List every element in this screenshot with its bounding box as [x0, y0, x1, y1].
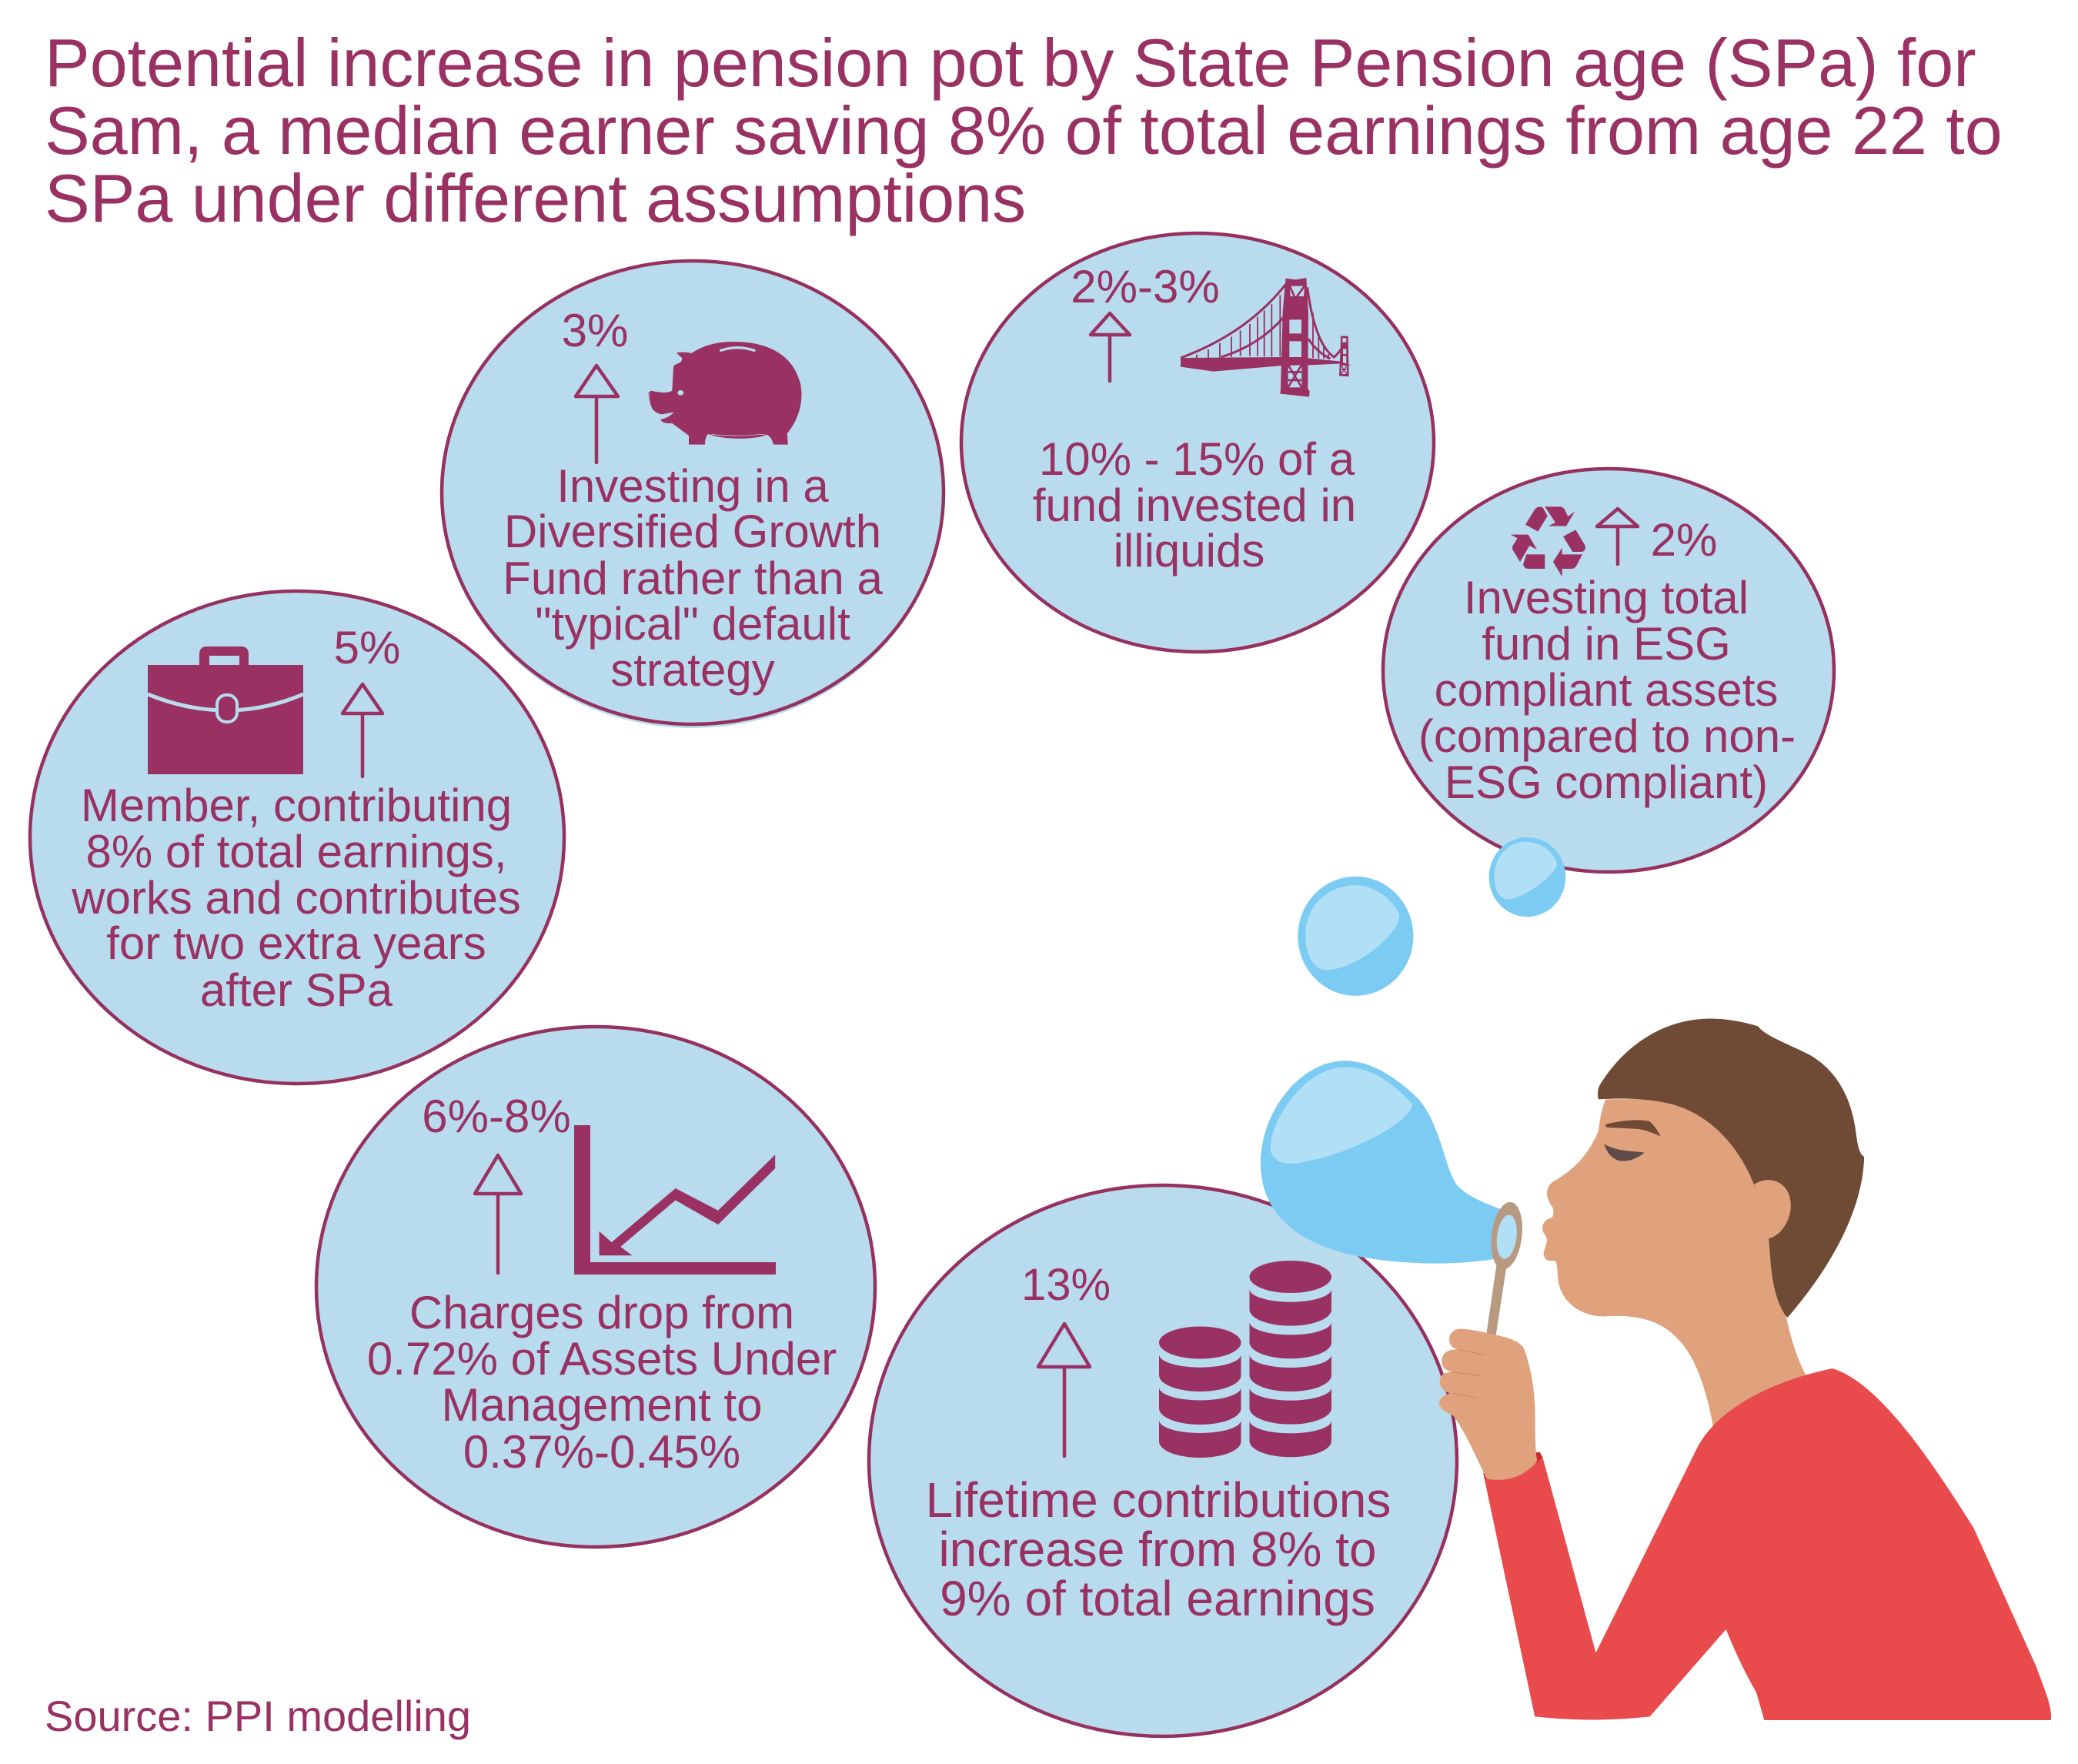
description: after SPa [200, 964, 393, 1016]
panel: work two extra years bubble [30, 591, 564, 1084]
title [45, 25, 2003, 236]
percentage: 2%: 2% [1651, 514, 1717, 566]
description [926, 1472, 1391, 1626]
percentage: 13%: 13% [1021, 1260, 1111, 1310]
illustration: person blowing bubbles [1261, 837, 2051, 1720]
description: fund invested in [1033, 479, 1356, 531]
description: works and contributes [71, 872, 521, 924]
description: strategy [610, 644, 775, 696]
description: fund in ESG [1482, 618, 1731, 670]
title: Potential increase in pension pot by State Pension age (SPa) for [45, 25, 1976, 101]
icon: suspension bridge [1181, 278, 1352, 397]
description: Lifetime contributions [926, 1472, 1391, 1528]
description [1033, 433, 1356, 576]
arrow up [1038, 1324, 1090, 1456]
panel: lifetime contributions bubble [869, 1185, 1457, 1736]
description [71, 780, 521, 1016]
description: (compared to non- [1418, 710, 1796, 762]
closed eye [1604, 1144, 1645, 1161]
description: Charges drop from [409, 1287, 794, 1338]
bubble: small near ESG panel [1489, 837, 1565, 917]
description: 8% of total earnings, [85, 826, 507, 877]
icon: coin stacks [1159, 1261, 1331, 1458]
icon: recycling symbol [1511, 506, 1585, 576]
arrow up [1597, 509, 1638, 564]
description: Investing total [1464, 572, 1749, 623]
description: Management to [442, 1379, 762, 1431]
icon: falling charges chart [574, 1125, 776, 1275]
description [503, 460, 883, 696]
description: compliant assets [1435, 664, 1778, 716]
arrow up [475, 1155, 521, 1273]
description [1418, 572, 1796, 808]
description: for two extra years [106, 917, 486, 969]
eyebrow [1605, 1120, 1661, 1136]
head and neck [1542, 1098, 1806, 1426]
description: Investing in a [556, 460, 829, 512]
percentage: 6%-8%: 6%-8% [422, 1091, 571, 1142]
finger creases [1452, 1349, 1485, 1398]
description: Fund rather than a [503, 553, 883, 604]
description: increase from 8% to [938, 1522, 1377, 1577]
arrow up [342, 684, 383, 777]
jumper cuff shadow [1483, 1452, 1542, 1480]
red jumper [1484, 1368, 2051, 1720]
title: SPa under different assumptions [45, 160, 1026, 236]
description [367, 1287, 837, 1478]
source note: Source: PPI modelling [45, 1692, 471, 1740]
bubble wand [1486, 1200, 1526, 1335]
icon: piggy bank [649, 342, 801, 445]
arrow up [576, 366, 618, 463]
percentage: 2%-3%: 2%-3% [1071, 261, 1220, 312]
description: illiquids [1114, 525, 1265, 576]
percentage: 5%: 5% [334, 622, 400, 673]
bubble: forming at wand [1261, 1061, 1502, 1264]
bubbles, head and jumper [1261, 837, 2051, 1720]
description: 0.72% of Assets Under [367, 1333, 837, 1385]
description: ESG compliant) [1445, 757, 1768, 808]
hand [1439, 1329, 1537, 1480]
description: Diversified Growth [504, 506, 881, 557]
description: Member, contributing [81, 780, 512, 831]
panel: charges bubble [316, 1027, 875, 1547]
hand and cuff [1439, 1329, 1542, 1480]
hair [1598, 1018, 1864, 1318]
arrow up [1091, 313, 1130, 381]
description: 9% of total earnings [940, 1571, 1375, 1626]
bubble: medium [1298, 877, 1413, 996]
panel: illiquids bubble [961, 233, 1434, 652]
panel: diversified growth fund bubble [442, 261, 944, 728]
description: "typical" default [535, 598, 850, 650]
title: Sam, a median earner saving 8% of total earnings from age 22 to [45, 92, 2003, 169]
description: 0.37%-0.45% [463, 1426, 740, 1478]
percentage: 3%: 3% [562, 305, 628, 356]
icon: briefcase [148, 646, 303, 774]
panel: ESG bubble [1383, 469, 1834, 872]
description: 10% - 15% of a [1039, 433, 1355, 485]
ear [1754, 1180, 1791, 1238]
